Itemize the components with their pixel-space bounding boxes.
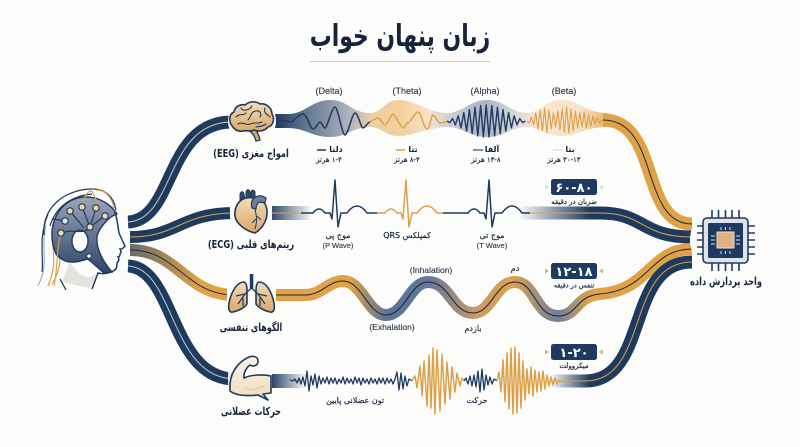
icon: head with EEG cap [38,189,129,290]
legend: delta [315,145,343,164]
ribbon: EEG to processor [603,120,692,224]
legend: theta: تتا [408,145,418,154]
hair strands [38,214,60,286]
electrodes [58,204,108,258]
icon: brain [228,97,276,145]
legend: beta: بتا [565,145,575,154]
ECG labels: موج پی [325,231,351,240]
ribbon: head to EEG [128,122,232,222]
title: زبان پنهان خواب [310,20,490,54]
legend: delta: دلتا [329,145,343,154]
EEG band names [315,86,576,96]
EMG labels [326,396,488,405]
movement burst 2 [497,347,564,414]
label: muscle: حرکات عضلانی [221,406,281,418]
ECG labels: موج تی [479,231,505,240]
cap wires [44,189,116,235]
theta wave [370,112,447,129]
ECG labels [323,231,508,250]
icon: flexed arm [228,356,272,400]
ECG beat: QRS [377,180,443,227]
label: processor: واحد پردازش داده [690,276,762,288]
ECG trace [301,180,530,227]
low tone signal 2 [464,369,497,392]
icon: lungs [227,273,276,315]
ECG labels: (P Wave) [323,241,354,250]
number badge: heart rate: ۶۰-۸۰ [555,181,593,196]
number badge: microvolts: ۱-۲۰ [559,346,589,361]
EEG band names: (Beta) [552,86,576,96]
EEG band names: (Alpha) [470,86,500,96]
ECG labels: کمپلکس QRS [383,231,431,240]
beta wave [527,107,606,133]
respiration wave ribbon [270,249,692,316]
EMG trace [290,347,564,414]
panel: EEG waves band [275,100,607,137]
label: ECG: ریتم‌های قلبی (ECG) [208,239,294,251]
ribbon: ECG left fade [268,206,312,220]
legend: alpha: آلفا [485,144,500,154]
ear opening [72,230,88,252]
number badge: heart rate [545,179,603,206]
face profile [92,212,125,289]
legend: theta: ۸-۴ هرتز [393,156,420,164]
EMG labels: حرکت [466,396,488,405]
icon: processor chip [690,204,762,276]
ECG beat: T wave [443,180,530,227]
alpha wave [447,105,525,137]
respiration labels: دم [511,264,520,273]
number badge: breaths: تنفس در دقیقه [554,282,594,290]
chip pins [697,210,755,271]
ribbon: head to ECG [130,213,235,237]
ribbon: head to muscle [128,266,235,379]
low tone signal [290,371,412,391]
legend: delta: ۱-۴ هرتز [315,156,342,164]
legend: beta [546,145,581,164]
number badge: microvolts [545,344,603,370]
icon: heart [230,189,272,233]
ECG beat: P wave [301,180,377,227]
number badge: microvolts: میکروولت [559,362,589,370]
ribbon: head to respiration [130,250,235,295]
EEG band names: (Theta) [392,86,422,96]
ribbon: muscle to processor [550,262,692,381]
legend: theta [393,145,420,164]
ribbon: muscle left fade [270,374,306,388]
label: EEG: امواج مغزی (EEG) [213,148,289,160]
respiration labels: (Inhalation) [410,265,452,275]
label: respiration: الگوهای تنفسی [220,321,282,334]
cap [52,197,117,273]
legend: beta: ۳۰-۱۳ هرتز [546,156,581,164]
number badge: breaths: ۱۲-۱۸ [555,265,593,280]
ECG labels: (T Wave) [477,241,508,250]
respiration labels [369,264,520,333]
EMG labels: تون عضلانی پایین [326,396,384,405]
respiration labels: بازدم [464,324,482,333]
delta wave [280,107,370,135]
legend: alpha: ۱۳-۸ هرتز [470,156,501,164]
movement burst 1 [412,348,464,414]
EEG band names: (Delta) [315,86,343,96]
respiration labels: (Exhalation) [369,322,415,332]
number badge: breaths [545,263,603,290]
number badge: heart rate: ضربان در دقیقه [551,198,597,206]
ribbon: ECG to processor [518,213,692,237]
legend: alpha [470,144,501,164]
